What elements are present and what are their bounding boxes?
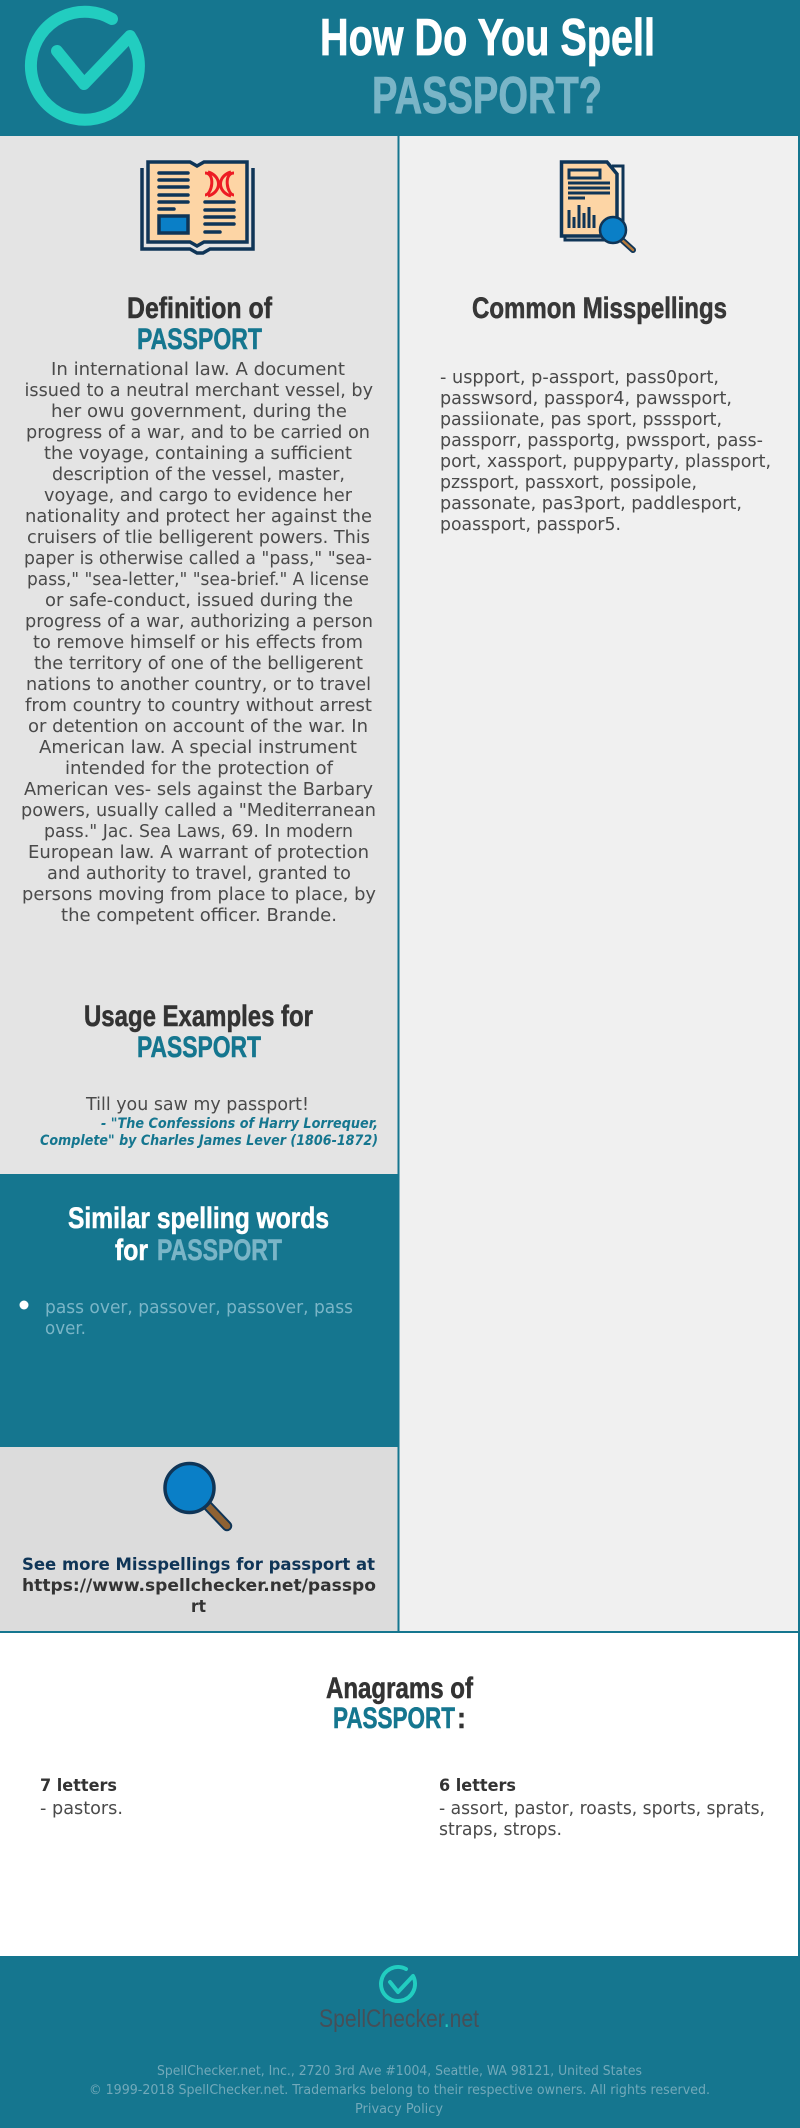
footer bbox=[0, 1956, 800, 2128]
bullet bbox=[20, 1300, 28, 1310]
icon: open book bbox=[142, 162, 253, 253]
see more text: See more Misspellings for passport at bbox=[22, 1555, 375, 1575]
anagrams: 7 letters bbox=[40, 1776, 123, 1819]
see more text: rt bbox=[191, 1597, 206, 1617]
panel: see more misspellings bbox=[0, 1447, 398, 1631]
title line two: PASSPORT? bbox=[372, 67, 602, 125]
footer wordmark: SpellChecker.net bbox=[319, 2005, 479, 2033]
header banner bbox=[0, 0, 800, 136]
panel: common misspellings bbox=[399, 136, 798, 1631]
misspellings list: port, xassport, puppyparty, plassport, bbox=[440, 451, 771, 472]
definition text: intended for the protection of bbox=[65, 758, 334, 779]
misspellings list: passwsord, passpor4, pawssport, bbox=[440, 388, 732, 409]
panel: definition bbox=[0, 136, 398, 1174]
heading: anagrams of passport: : bbox=[457, 1702, 466, 1735]
definition text: progress of a war, authorizing a person bbox=[25, 611, 373, 632]
icon: checkmark logo bbox=[31, 12, 139, 120]
similar words list bbox=[45, 1297, 353, 1339]
heading: definition of passport: PASSPORT bbox=[137, 323, 262, 356]
definition text: In international law. A document bbox=[51, 359, 345, 380]
heading: definition of passport: Definition of bbox=[127, 292, 273, 325]
footer text: © 1999-2018 SpellChecker.net. Trademarks belong to their respective owners. All rights reserved. bbox=[89, 2083, 710, 2098]
definition text: American law. A special instrument bbox=[39, 737, 357, 758]
heading: anagrams of passport bbox=[326, 1672, 474, 1735]
definition text: progress of a war, and to be carried on bbox=[26, 422, 370, 443]
misspellings list: passonate, pas3port, paddlesport, bbox=[440, 493, 742, 514]
panel: similar spelling words bbox=[0, 1174, 400, 1447]
title line one: How Do You Spell bbox=[320, 9, 655, 67]
definition text: her owu government, during the bbox=[51, 401, 347, 422]
heading: similar spelling words: Similar spelling words bbox=[68, 1202, 329, 1235]
definition text: paper is otherwise called a "pass," "sea- bbox=[24, 548, 372, 569]
misspellings list bbox=[440, 367, 771, 535]
icon: document with magnifier bbox=[562, 162, 633, 250]
misspellings list: passporr, passportg, pwssport, pass- bbox=[440, 430, 763, 451]
anagrams: 6 letters: - assort, pastor, roasts, sports, sprats, bbox=[439, 1798, 765, 1819]
definition text: voyage, and cargo to evidence her bbox=[44, 485, 353, 506]
anagrams: 7 letters: - pastors. bbox=[40, 1798, 123, 1819]
heading: usage examples bbox=[84, 1000, 313, 1064]
definition text: the voyage, containing a sufficient bbox=[44, 443, 352, 464]
heading: similar spelling words: PASSPORT bbox=[157, 1234, 282, 1267]
usage example quote: - "The Confessions of Harry Lorrequer, bbox=[101, 1116, 378, 1132]
anagrams: 6 letters: 6 letters bbox=[439, 1776, 516, 1796]
definition text: American ves- sels against the Barbary bbox=[24, 779, 373, 800]
definition text: or detention on account of the war. In bbox=[28, 716, 368, 737]
see more text bbox=[22, 1555, 376, 1617]
definition text: pass," "sea-letter," "sea-brief." A license bbox=[27, 569, 369, 590]
heading: anagrams of passport: Anagrams of bbox=[326, 1672, 474, 1705]
definition text: the competent officer. Brande. bbox=[61, 905, 337, 926]
heading: common misspellings: Common Misspellings bbox=[472, 292, 727, 325]
definition text: persons moving from place to place, by bbox=[22, 884, 376, 905]
misspellings list: poassport, passpor5. bbox=[440, 514, 621, 535]
definition text: cruisers of tlie belligerent powers. This bbox=[27, 527, 370, 548]
similar words list: pass over, passover, passover, pass bbox=[45, 1297, 353, 1318]
definition text: pass." Jac. Sea Laws, 69. In modern bbox=[44, 821, 353, 842]
heading: anagrams of passport: PASSPORT bbox=[333, 1702, 455, 1735]
icon: magnifying glass bbox=[165, 1464, 227, 1526]
misspellings list: pzssport, passxort, possipole, bbox=[440, 472, 697, 493]
definition text: description of the vessel, master, bbox=[52, 464, 345, 485]
anagrams: 6 letters: straps, strops. bbox=[439, 1819, 562, 1840]
heading: definition of passport bbox=[127, 292, 273, 356]
anagrams: 7 letters: 7 letters bbox=[40, 1776, 117, 1796]
definition text: the territory of one of the belligerent bbox=[34, 653, 363, 674]
usage example quote: Till you saw my passport! bbox=[85, 1094, 309, 1115]
footer text: Privacy Policy bbox=[355, 2102, 443, 2117]
definition text: nationality and protect her against the bbox=[25, 506, 372, 527]
see more text: https://www.spellchecker.net/passpo bbox=[22, 1576, 376, 1596]
anagrams: 6 letters bbox=[439, 1776, 765, 1840]
misspellings list: passiionate, pas sport, psssport, bbox=[440, 409, 722, 430]
definition text: powers, usually called a "Mediterranean bbox=[21, 800, 376, 821]
icon: footer logo bbox=[381, 1967, 415, 2001]
misspellings list: - uspport, p-assport, pass0port, bbox=[440, 367, 719, 388]
definition text: or safe-conduct, issued during the bbox=[45, 590, 353, 611]
similar words list: over. bbox=[45, 1318, 86, 1339]
definition text: and authority to travel, granted to bbox=[47, 863, 351, 884]
definition text: European law. A warrant of protection bbox=[28, 842, 369, 863]
definition text: nations to another country, or to travel bbox=[26, 674, 371, 695]
footer text bbox=[89, 2064, 710, 2117]
heading: usage examples: PASSPORT bbox=[137, 1031, 261, 1064]
heading: usage examples: Usage Examples for bbox=[84, 1000, 313, 1033]
heading: similar spelling words: for bbox=[115, 1234, 148, 1267]
definition text: issued to a neutral merchant vessel, by bbox=[24, 380, 373, 401]
usage example quote bbox=[40, 1094, 378, 1149]
definition text: from country to country without arrest bbox=[25, 695, 372, 716]
footer text: SpellChecker.net, Inc., 2720 3rd Ave #1004, Seattle, WA 98121, United States bbox=[157, 2064, 642, 2079]
usage example quote: Complete" by Charles James Lever (1806-1872) bbox=[40, 1133, 378, 1149]
definition text bbox=[21, 359, 376, 926]
definition text: to remove himself or his effects from bbox=[33, 632, 363, 653]
heading: similar spelling words bbox=[68, 1202, 329, 1267]
panel: anagrams bbox=[0, 1633, 798, 1956]
